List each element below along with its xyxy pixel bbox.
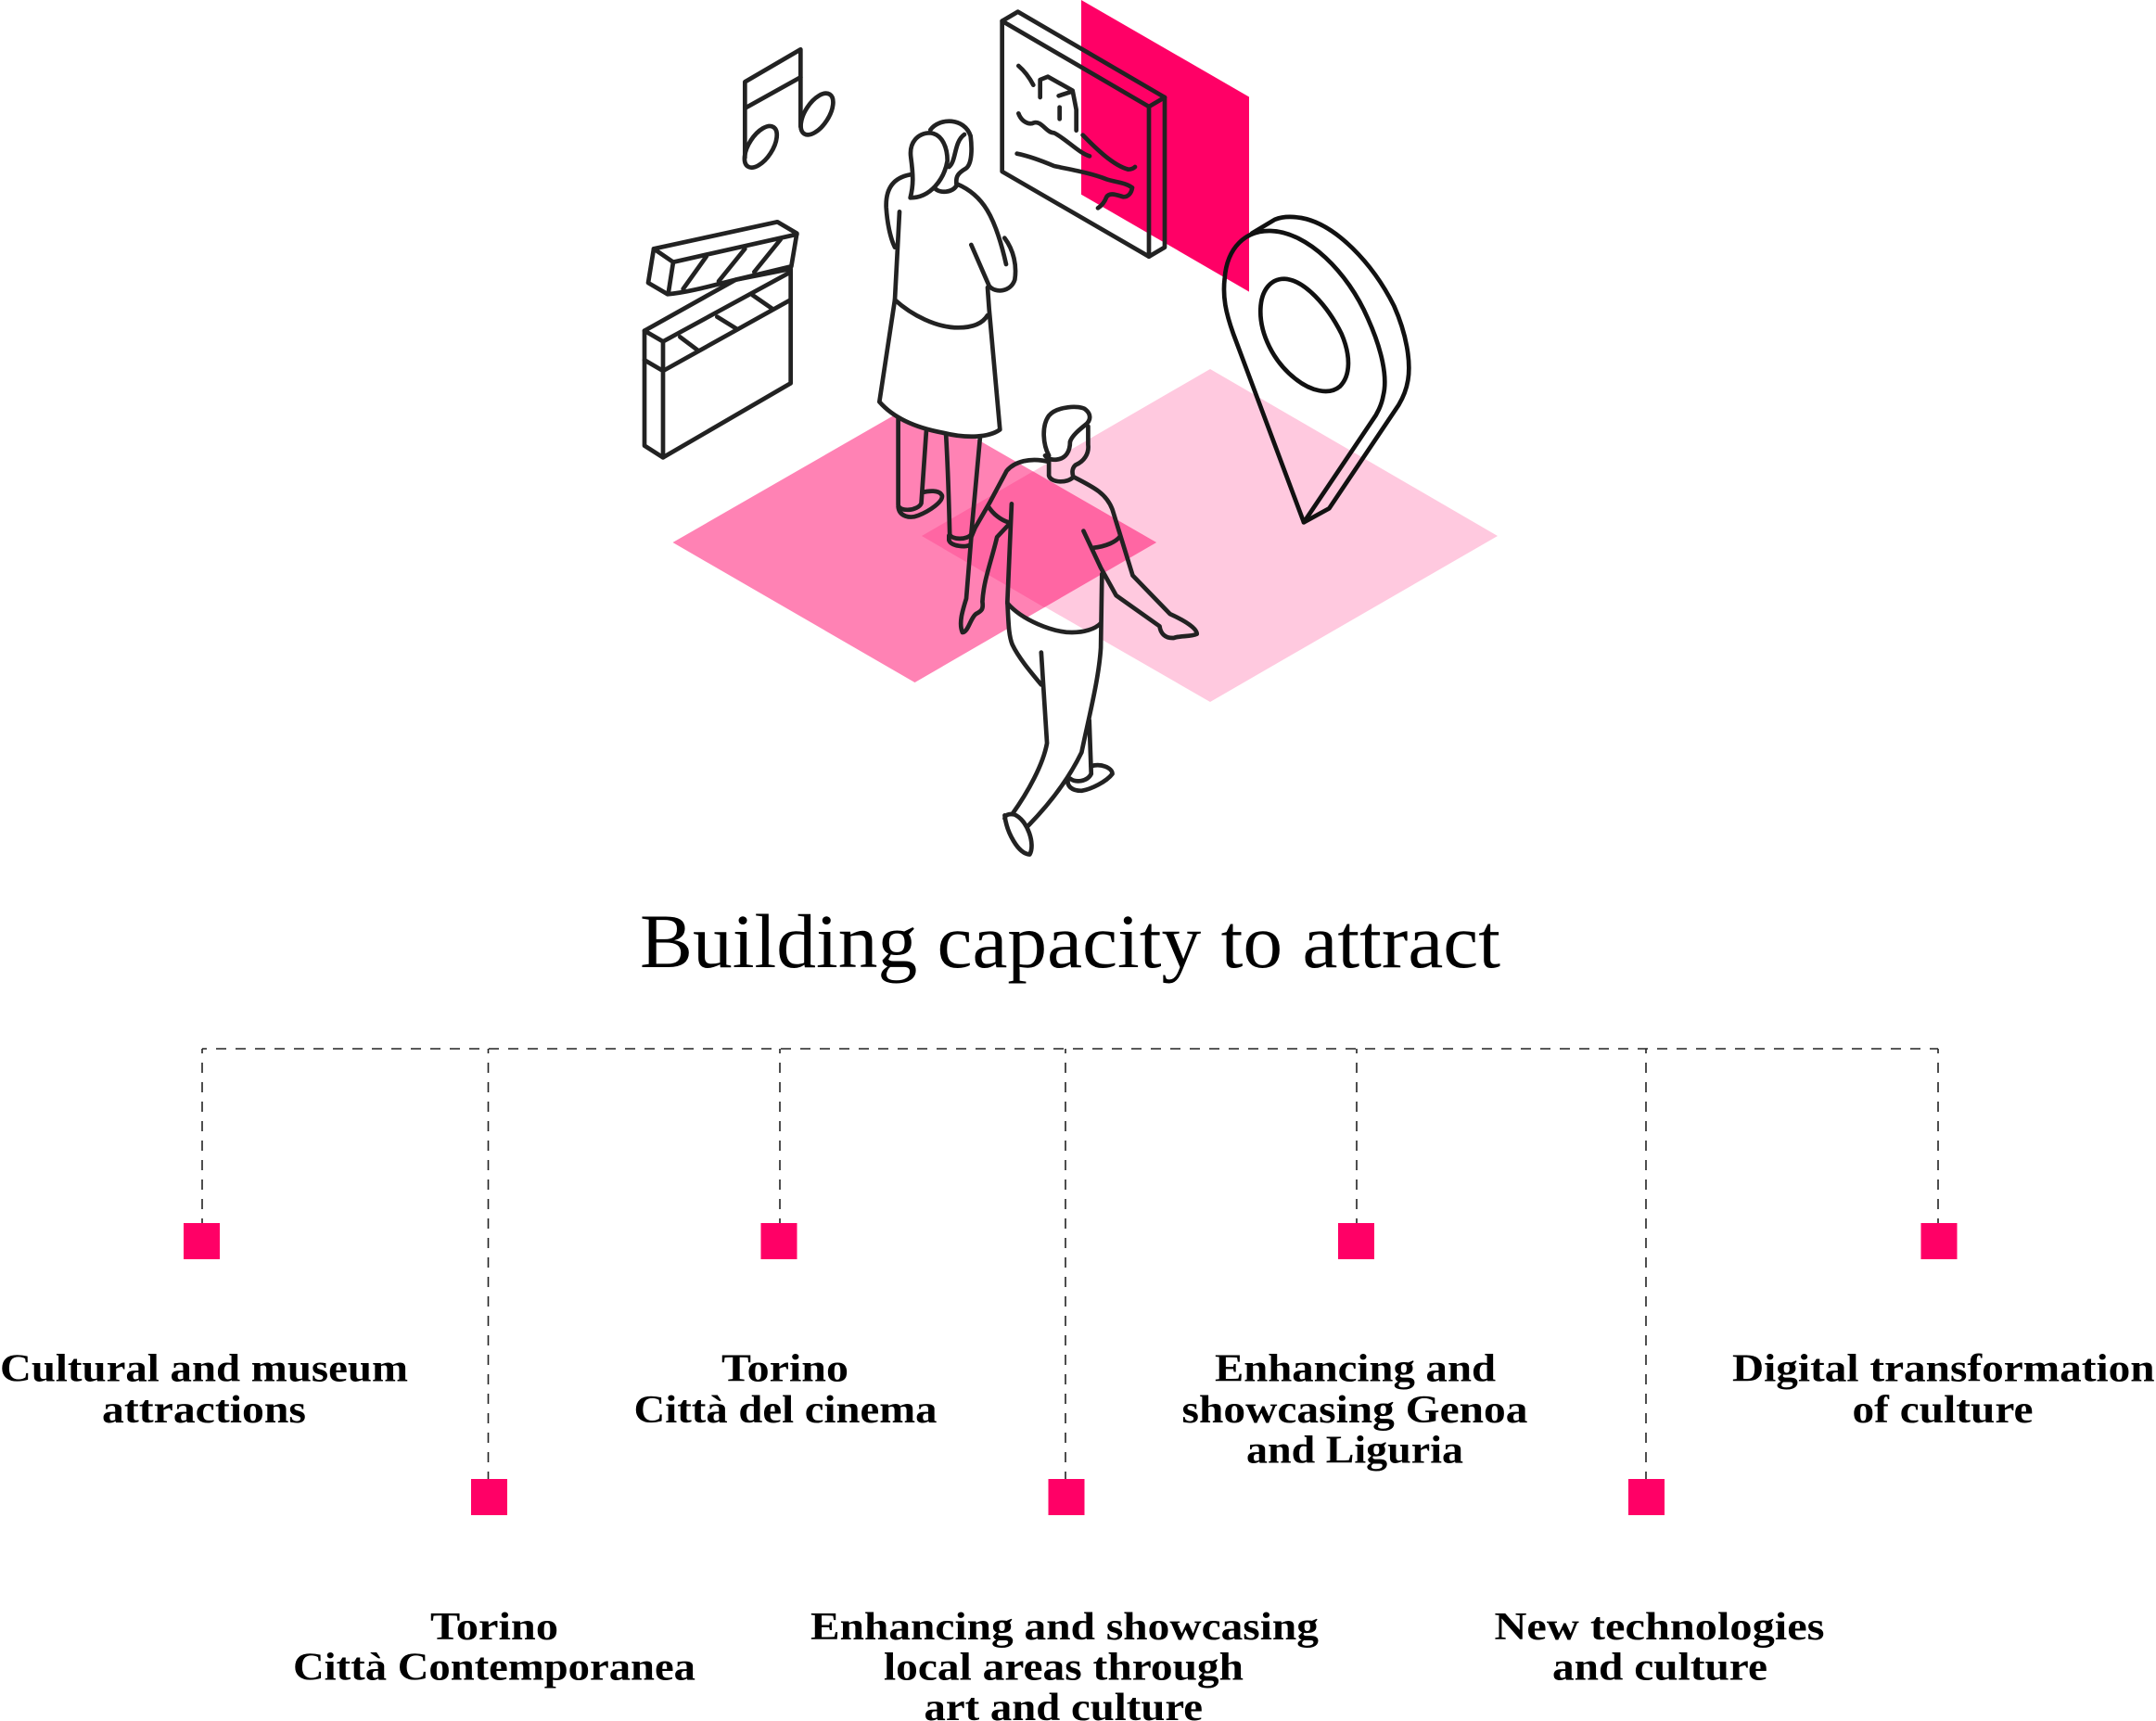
item: Enhancing and showcasing Genoa and Liguria: and Liguria [1246,1430,1463,1472]
item: New technologies and culture [1495,1479,1825,1689]
item: Torino Città del cinema: Torino [721,1348,848,1391]
floor: light pink diamond [922,369,1498,702]
icon: location pin [1224,217,1409,522]
item: Digital transformation of culture: Digital transformation [1732,1348,2155,1391]
dashed connector tree [202,1049,1938,1479]
item: New technologies and culture: New technologies [1495,1606,1825,1649]
item: Digital transformation of culture [1732,1223,2155,1432]
item: Cultural and museum attractions: attractions [102,1389,306,1432]
woman: legs [899,408,982,546]
woman: body and head [879,121,1015,437]
item: Cultural and museum attractions: Cultural and museum [0,1348,408,1391]
item: Enhancing and showcasing Genoa and Liguria [1181,1223,1528,1472]
item: Enhancing and showcasing Genoa and Liguria: showcasing Genoa [1181,1389,1528,1432]
item: Enhancing and showcasing local areas through art and culture [810,1479,1319,1721]
icon: framed painting lines [1002,12,1165,257]
item: Torino Città del cinema [634,1223,937,1432]
magenta wall panel [1081,0,1249,292]
icon: film clapperboard [644,222,797,457]
item: Enhancing and showcasing local areas through art and culture: Enhancing and showcasing [810,1606,1319,1649]
item: Enhancing and showcasing Genoa and Liguria: Enhancing and [1215,1348,1496,1391]
icon: music notes [738,49,839,172]
item: Torino Città Contemporanea: Città Contemporanea [293,1647,695,1689]
floor: dark pink diamond [673,403,1156,682]
item: Torino Città Contemporanea: Torino [430,1606,558,1649]
man: walking figure [961,407,1197,854]
floor: diamond overlap [922,471,1156,607]
item: New technologies and culture: and culture [1552,1647,1767,1689]
item: Torino Città Contemporanea [293,1479,695,1689]
item: Enhancing and showcasing local areas through art and culture: local areas through [884,1647,1244,1689]
item: Cultural and museum attractions [0,1223,408,1432]
item: Torino Città del cinema: Città del cinema [634,1389,937,1432]
title: Building capacity to attract [640,899,1500,984]
item: Digital transformation of culture: of culture [1853,1389,2033,1432]
